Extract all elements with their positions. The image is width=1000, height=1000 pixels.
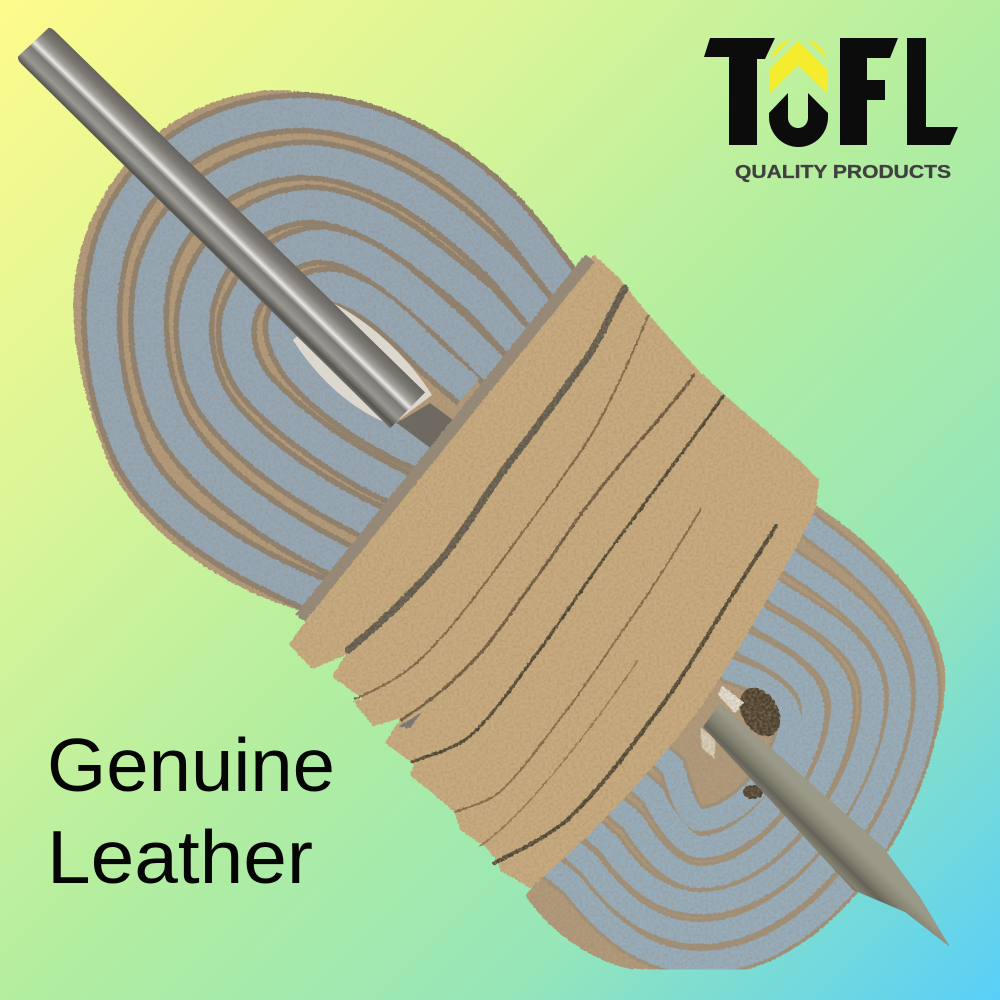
coil centre opening [293,303,432,425]
logo letter F [840,38,898,145]
heading: Genuine Leather: Genuine [47,723,335,807]
upper needle [13,25,457,450]
heading: Genuine Leather [47,723,335,899]
heading: Genuine Leather: Leather [47,815,313,899]
logo letter U [769,93,828,147]
photo: leather coil upper left lobe [73,90,578,612]
needle end stub [397,403,457,450]
logo yellow arrow [769,39,828,94]
photo: wrapped leather band [289,255,819,888]
logo: TuFL Quality Products [704,38,958,182]
band strip gaps [348,288,776,863]
logo letter L [907,38,958,145]
photo: leather coil lower right lobe [525,500,945,969]
logo letter T [704,38,775,145]
logo tagline: QUALITY PRODUCTS [735,162,951,182]
lower needle [703,703,950,947]
band shadow edge [300,258,590,618]
